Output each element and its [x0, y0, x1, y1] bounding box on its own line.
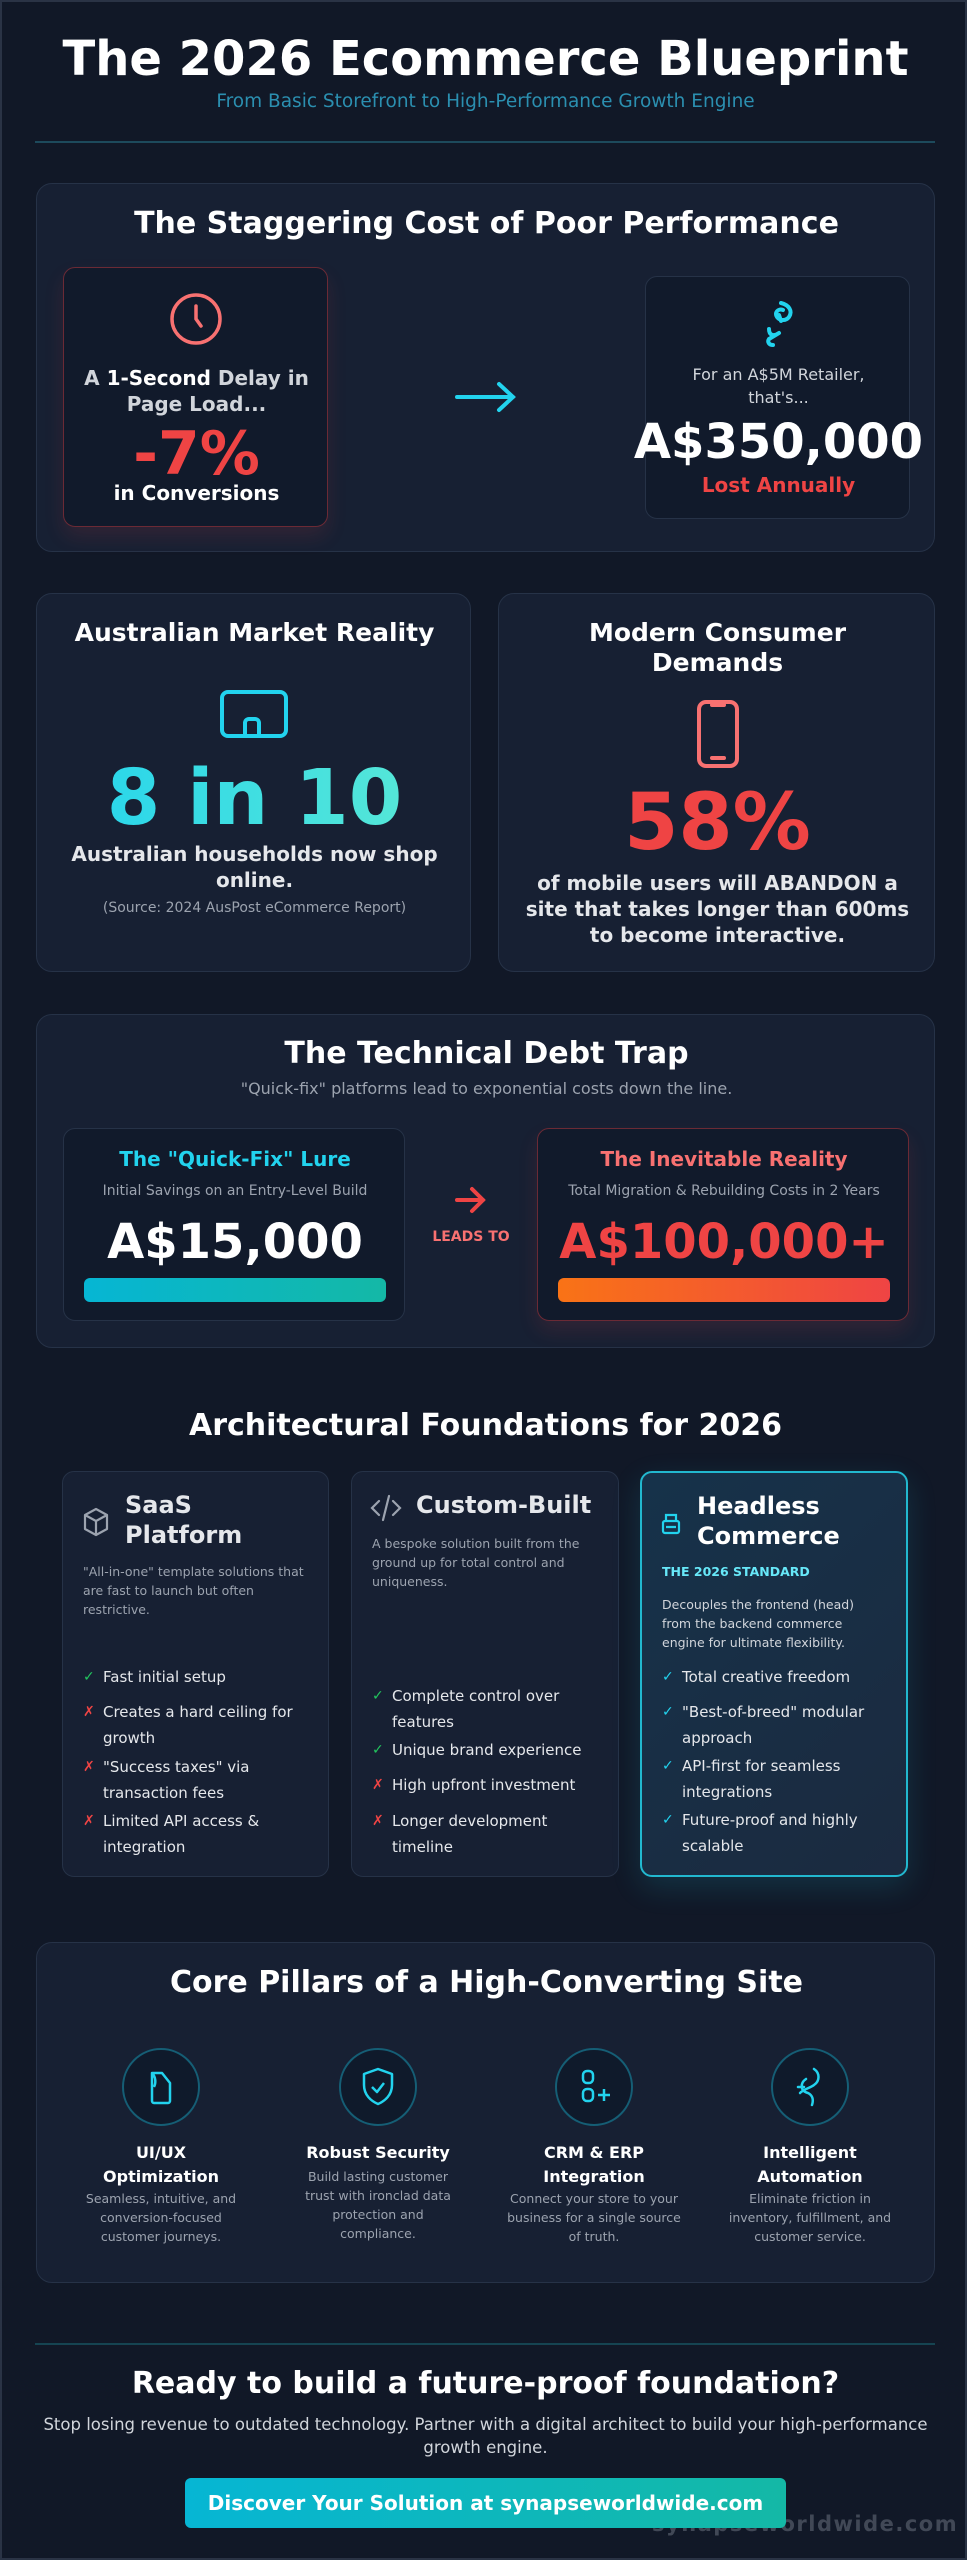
heading: Australian Market Reality	[75, 618, 434, 647]
panel: saas: "Success taxes" via transaction fees	[103, 1758, 249, 1802]
panel: saas: Limited API access & integration	[103, 1812, 259, 1856]
panel: headless commerce: Headless	[697, 1492, 820, 1520]
pillar: automation: Eliminate friction in inventory, fulfillment, and customer service.	[729, 2191, 891, 2244]
icon: money	[766, 301, 793, 347]
panel: technical debt trap: "Quick-fix" platforms lead to exponential costs down the line.	[241, 1079, 732, 1098]
card: reality: The Inevitable Reality	[600, 1147, 848, 1171]
pillar: automation: Automation	[757, 2167, 863, 2186]
pillar: UI/UX: Seamless, intuitive, and conversion-focused customer journeys.	[86, 2191, 236, 2244]
panel: australian market	[36, 593, 471, 972]
heading: architectural foundations: Architectural Foundations for 2026	[189, 1408, 782, 1443]
text: that's...	[748, 388, 809, 407]
heading: The Technical Debt Trap	[284, 1036, 689, 1071]
panel: australian market: Australian households now shop online.	[71, 842, 438, 892]
pillar: automation: Intelligent	[763, 2143, 857, 2162]
card: reality: Total Migration & Rebuilding Costs in 2 Years	[568, 1183, 880, 1199]
card: quick fix: Initial Savings on an Entry-Level Build	[103, 1183, 367, 1199]
pillar: UI/UX: UI/UX	[136, 2143, 186, 2162]
panel: headless commerce: ✓	[662, 1704, 674, 1720]
pillar: security	[305, 2048, 451, 2241]
heading: The Staggering Cost of Poor Performance	[134, 206, 839, 241]
pillar: UI/UX: Optimization	[103, 2167, 219, 2186]
panel: saas: Creates a hard ceiling for growth	[103, 1703, 293, 1747]
bar	[558, 1278, 890, 1302]
text: For an A$5M Retailer,	[692, 365, 865, 384]
panel: headless commerce: ✓	[662, 1758, 674, 1774]
panel: saas: ✗	[83, 1813, 95, 1829]
card: quick fix: The "Quick-Fix" Lure	[119, 1147, 351, 1171]
CTA text: Stop losing revenue to outdated technology. Partner with a digital architect to build your high-performance growth engine.	[43, 2415, 928, 2457]
panel: custom built: Longer development timeline	[392, 1812, 547, 1856]
arrow: leads to	[432, 1186, 510, 1245]
panel: custom built: Custom-Built	[416, 1491, 591, 1519]
stat: 8 in 10: 8 in 10	[107, 754, 402, 843]
panel: headless commerce: THE 2026 STANDARD	[662, 1564, 810, 1579]
panel: headless commerce	[640, 1471, 908, 1877]
panel: custom built	[351, 1471, 619, 1877]
CTA button	[185, 2478, 786, 2528]
title: The 2026 Ecommerce Blueprint	[62, 31, 909, 87]
card: reality: A$100,000+	[559, 1214, 889, 1270]
card: delay	[63, 267, 328, 527]
arrow: leads to: LEADS TO	[432, 1229, 510, 1245]
panel: headless commerce: Total creative freedom	[682, 1668, 850, 1686]
panel: saas: ✗	[83, 1704, 95, 1720]
panel: custom built: High upfront investment	[392, 1776, 575, 1794]
panel: saas: Fast initial setup	[103, 1668, 226, 1686]
CTA button: Discover Your Solution at synapseworldwide.com	[208, 2491, 763, 2515]
panel: custom built: ✓	[372, 1742, 384, 1758]
heading: Modern Consumer	[589, 618, 846, 647]
icon: storefront	[220, 690, 288, 738]
icon: phone	[697, 700, 739, 768]
card: revenue loss	[645, 276, 910, 519]
stat: -7%: -7%	[133, 419, 260, 489]
icon: layers	[662, 1514, 680, 1534]
CTA heading: Ready to build a future-proof foundation?	[132, 2366, 839, 2401]
panel: headless commerce: ✓	[662, 1669, 674, 1685]
card: revenue loss: Lost Annually	[702, 473, 855, 497]
card: quick fix	[63, 1128, 405, 1321]
pillar: security: Build lasting customer trust with ironclad data protection and compliance.	[305, 2169, 451, 2241]
text	[692, 365, 865, 407]
panel: consumer demands: of mobile users will ABANDON a site that takes longer than 600ms to become interactive.	[526, 871, 909, 947]
heading: Demands	[652, 648, 783, 677]
heading	[589, 618, 846, 677]
card: reality	[537, 1128, 909, 1321]
panel: technical debt trap	[36, 1014, 935, 1348]
panel: saas: Platform	[125, 1521, 242, 1549]
panel: headless commerce: API-first for seamless integrations	[682, 1757, 840, 1801]
heading: Core Pillars of a High-Converting Site	[170, 1965, 803, 2000]
panel: headless commerce: "Best-of-breed" modular approach	[682, 1703, 864, 1747]
text: delay: A 1-Second Delay in Page Load...	[84, 366, 309, 416]
pillar: UI/UX	[86, 2048, 236, 2244]
icon: code	[370, 1494, 402, 1522]
icon: cube	[84, 1508, 108, 1536]
pillar: automation	[729, 2048, 891, 2244]
panel: headless commerce: Commerce	[697, 1522, 840, 1550]
arrow	[455, 382, 516, 412]
source: (Source: 2024 AusPost eCommerce Report)	[103, 900, 406, 916]
stat: A$350,000: A$350,000	[634, 414, 923, 470]
panel: custom built: ✗	[372, 1777, 384, 1793]
bar	[84, 1278, 386, 1302]
pillar: security: Robust Security	[306, 2143, 450, 2162]
panel: consumer demands	[498, 593, 935, 972]
panel: cost of poor performance	[36, 183, 935, 552]
panel: saas: "All-in-one" template solutions that are fast to launch but often restrictive.	[83, 1564, 304, 1617]
icon: clock	[170, 293, 222, 345]
watermark: synapseworldwide.com	[652, 2512, 958, 2536]
subtitle: From Basic Storefront to High-Performance Growth Engine	[216, 91, 755, 112]
panel: headless commerce: ✓	[662, 1812, 674, 1828]
panel: custom built: A bespoke solution built from the ground up for total control and uniqueness.	[372, 1536, 579, 1589]
panel: headless commerce: Decouples the frontend (head) from the backend commerce engine for ultimate flexibility.	[662, 1597, 854, 1650]
panel: custom built: ✗	[372, 1813, 384, 1829]
panel: headless commerce: Future-proof and highly scalable	[682, 1811, 858, 1855]
panel: custom built: Unique brand experience	[392, 1741, 582, 1759]
panel: saas: ✓	[83, 1669, 95, 1685]
pillar: CRM	[507, 2048, 681, 2244]
card: quick fix: A$15,000	[107, 1214, 363, 1270]
pillar: CRM: CRM & ERP	[544, 2143, 644, 2162]
panel: core pillars	[36, 1942, 935, 2283]
panel: saas: ✗	[83, 1759, 95, 1775]
stat: 8 in 10	[37, 754, 472, 844]
card: delay: in Conversions	[114, 481, 279, 505]
panel: custom built: Complete control over features	[392, 1687, 559, 1731]
panel: custom built: ✓	[372, 1688, 384, 1704]
pillar: CRM: Connect your store to your business for a single source of truth.	[507, 2191, 681, 2244]
stat: 58%: 58%	[624, 778, 811, 868]
panel: saas: SaaS	[125, 1491, 192, 1519]
pillar: CRM: Integration	[543, 2167, 645, 2186]
panel: saas	[62, 1471, 329, 1877]
